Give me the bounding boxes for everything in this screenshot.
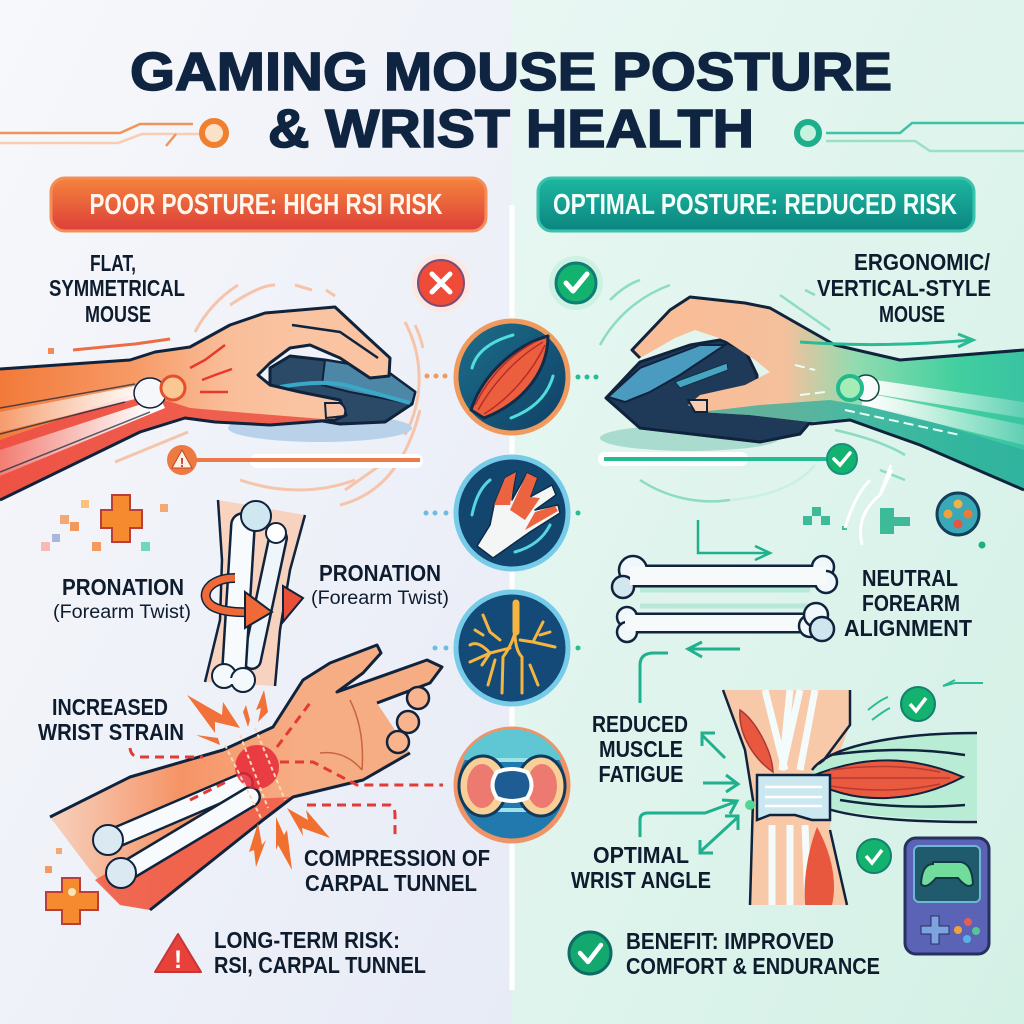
label: neutral forearm alignment [844, 565, 972, 641]
label: ergonomic mouse: VERTICAL-STYLE [817, 275, 991, 301]
label: optimal wrist angle: WRIST ANGLE [571, 867, 711, 893]
label: ergonomic mouse: MOUSE [879, 301, 945, 327]
label: increased wrist strain: WRIST STRAIN [38, 719, 184, 745]
decoration pixels and controller icon: upper right [803, 465, 986, 548]
callout: long-term risk: LONG-TERM RISK: [214, 927, 400, 953]
center icon: tendons [456, 457, 568, 569]
circuit decoration left [0, 121, 226, 146]
label: optimal wrist angle: OPTIMAL [593, 842, 689, 868]
title [130, 42, 892, 159]
circuit decoration right [797, 122, 1024, 151]
center icon: nerve [456, 592, 568, 704]
label: pronation left: PRONATION [62, 574, 184, 600]
icon: green check [549, 256, 603, 310]
label: pronation left [53, 574, 191, 623]
label: flat symmetrical mouse [49, 250, 185, 327]
label: flat symmetrical mouse: FLAT, [90, 250, 136, 276]
label: flat symmetrical mouse: SYMMETRICAL [49, 275, 185, 301]
connector dots [424, 374, 598, 650]
label: pronation right: (Forearm Twist) [311, 588, 449, 609]
title: GAMING MOUSE POSTURE [130, 42, 892, 102]
warning slider [167, 445, 423, 475]
center divider [510, 205, 514, 990]
banner: poor posture [51, 178, 486, 231]
label: optimal wrist angle [571, 842, 711, 893]
callout: long-term risk [155, 927, 426, 978]
icon: handheld game console [905, 838, 989, 954]
banner: optimal posture [538, 178, 974, 231]
callout: long-term risk: RSI, CARPAL TUNNEL [214, 952, 426, 978]
callout: benefit: BENEFIT: IMPROVED [626, 928, 834, 954]
background: optimal posture side [512, 0, 1024, 1024]
check slider [598, 444, 857, 474]
illustration: neutral wrist muscles [640, 690, 977, 905]
icon: red x [412, 254, 470, 312]
title: & WRIST HEALTH [268, 99, 754, 159]
callout: benefit [569, 928, 880, 979]
background: poor posture side [0, 0, 512, 1024]
illustration: poor posture arm and mouse [0, 285, 423, 505]
label: compression of carpal tunnel: CARPAL TUNNEL [305, 870, 477, 896]
label: neutral forearm alignment: ALIGNMENT [844, 615, 972, 641]
label: reduced muscle fatigue [592, 711, 688, 787]
center icon: carpal tunnel [456, 729, 568, 841]
label: compression of carpal tunnel: COMPRESSION OF [304, 845, 490, 871]
label: increased wrist strain [38, 694, 184, 745]
label: pronation right [311, 560, 449, 609]
center icon: muscle [456, 321, 568, 433]
label: pronation right: PRONATION [319, 560, 441, 586]
label: ergonomic mouse [817, 249, 991, 327]
illustration: optimal posture arm and mouse [600, 280, 1024, 501]
callout: benefit: COMFORT & ENDURANCE [626, 953, 880, 979]
label: reduced muscle fatigue: REDUCED [592, 711, 688, 737]
label: increased wrist strain: INCREASED [52, 694, 168, 720]
bones: pronation twist [205, 500, 305, 692]
callout: long-term risk: ! [174, 946, 182, 974]
icon: check lower [857, 839, 891, 873]
pixel plus icon: upper left [41, 495, 168, 551]
banner: poor posture: POOR POSTURE: HIGH RSI RISK [90, 189, 443, 221]
label: reduced muscle fatigue: MUSCLE [599, 736, 683, 762]
label: ergonomic mouse: ERGONOMIC/ [854, 249, 991, 275]
label: compression of carpal tunnel [304, 845, 490, 896]
pixel plus icon: lower left [45, 848, 98, 924]
label: pronation left: (Forearm Twist) [53, 602, 191, 623]
arrows and bones: neutral alignment [612, 520, 837, 703]
label: flat symmetrical mouse: MOUSE [85, 301, 151, 327]
warning slider: ! [180, 455, 184, 470]
label: neutral forearm alignment: FOREARM [862, 590, 960, 616]
label: neutral forearm alignment: NEUTRAL [862, 565, 958, 591]
label: reduced muscle fatigue: FATIGUE [598, 761, 684, 787]
illustration: strained wrist and hand [50, 645, 443, 910]
icon: check upper [868, 680, 983, 721]
